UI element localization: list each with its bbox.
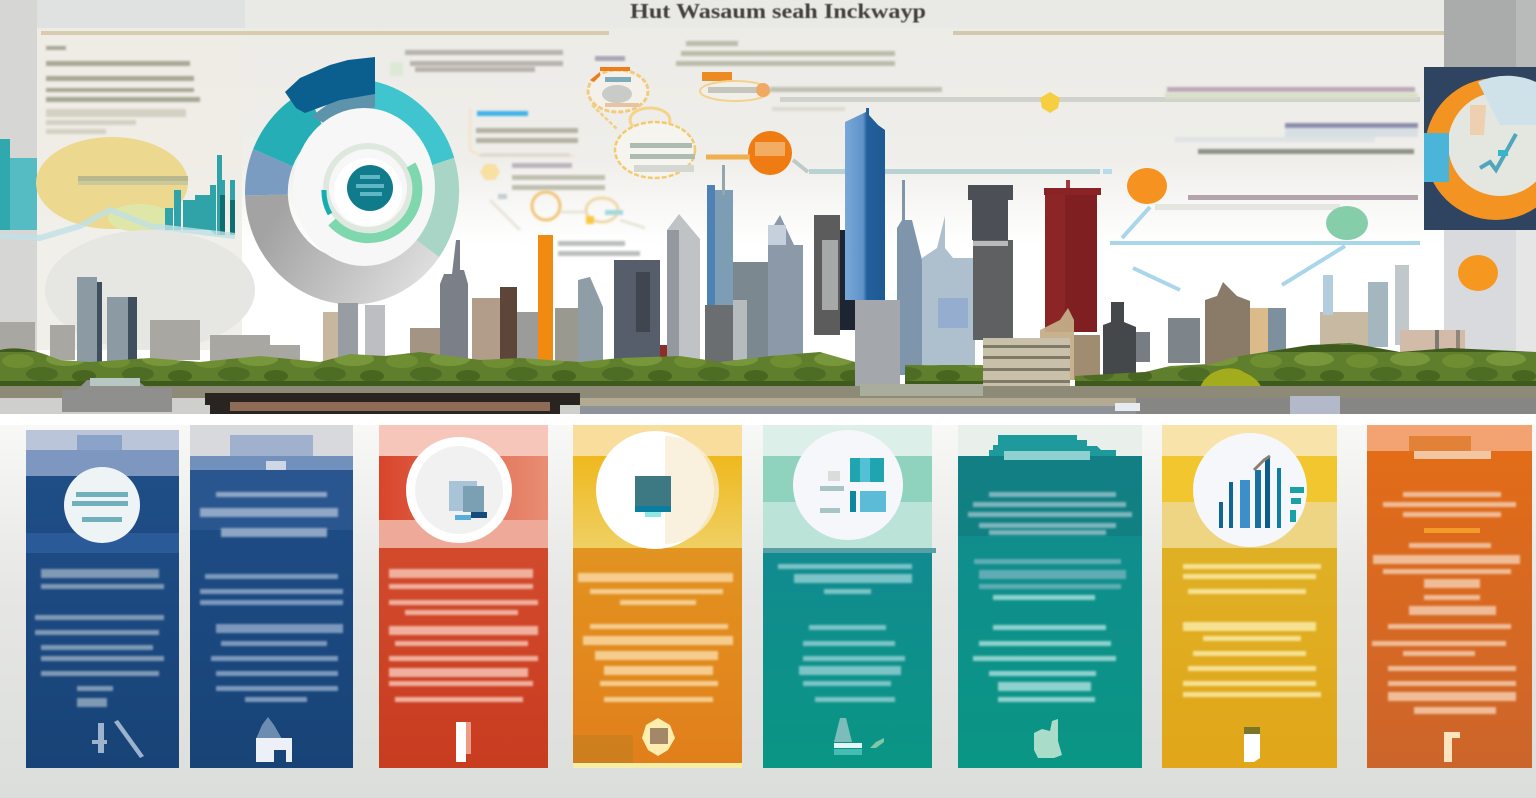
blue network lines xyxy=(1110,207,1420,290)
panel 5: teal xyxy=(763,425,936,768)
body text xyxy=(578,573,733,702)
gray tower base in front of trees xyxy=(855,300,900,388)
panel 2: navy with tab xyxy=(190,425,353,768)
header rule left xyxy=(41,31,609,35)
small connected flow rings xyxy=(490,192,645,230)
second orange callout xyxy=(700,72,770,101)
tab heading xyxy=(1004,451,1090,460)
mid towers xyxy=(555,308,583,364)
dark column tower xyxy=(968,185,1013,340)
donut green right segment xyxy=(422,165,438,244)
donut inner teal arc xyxy=(324,190,330,214)
icon: crane xyxy=(834,718,884,755)
donut dark blue arrow xyxy=(285,57,375,113)
top backdrop panel xyxy=(0,0,1536,420)
tab heading xyxy=(1414,451,1491,459)
orange ring callout xyxy=(588,67,648,112)
blue skyscraper xyxy=(845,108,885,300)
icon: bottle xyxy=(1244,727,1260,762)
orange bar tower xyxy=(538,235,553,360)
building under donut xyxy=(323,312,338,362)
orange highlight line xyxy=(1424,528,1480,533)
donut hub xyxy=(347,165,393,211)
right icon badge xyxy=(1424,67,1536,230)
badge icon xyxy=(449,481,487,520)
icon: hand xyxy=(1034,719,1062,758)
pale disc behind skyline xyxy=(45,230,255,350)
badge circle xyxy=(596,431,714,549)
icon: flag xyxy=(1444,732,1460,762)
horizontal line with gold marker xyxy=(780,92,1420,113)
boat xyxy=(62,380,172,412)
header rule right xyxy=(953,31,1444,35)
body text xyxy=(389,569,538,702)
badge icon xyxy=(635,476,671,517)
text beside orange bar xyxy=(558,241,640,256)
icon: badge xyxy=(642,718,675,756)
callout above donut xyxy=(390,50,563,76)
orange node 2 xyxy=(1127,168,1167,204)
body text xyxy=(1372,492,1520,714)
red column tower xyxy=(1044,180,1101,332)
donut teal left segment xyxy=(273,111,316,158)
small label above ring xyxy=(595,56,625,61)
mid left tower with spire xyxy=(440,240,468,374)
badge text xyxy=(72,492,128,522)
badge icon xyxy=(820,458,886,513)
connector from orange node to skyline xyxy=(793,160,1112,174)
pale label line xyxy=(1155,204,1340,210)
donut slate accent xyxy=(312,93,375,127)
callout: blue label block xyxy=(470,108,578,157)
icon: tools xyxy=(92,720,144,758)
callout: gold hexagon with text xyxy=(480,163,605,190)
orange node 3 xyxy=(1458,255,1498,291)
donut inner white disc xyxy=(293,108,435,266)
upper center text lines xyxy=(676,41,895,66)
left towers xyxy=(77,277,129,367)
panel 1: navy xyxy=(26,430,179,768)
body text xyxy=(35,569,164,707)
heading lines xyxy=(200,492,338,537)
brown buildings xyxy=(472,298,500,364)
body text xyxy=(200,574,343,702)
upper right text rows xyxy=(770,87,942,111)
tan buildings xyxy=(1040,308,1074,380)
dock xyxy=(205,393,580,414)
body text xyxy=(778,564,912,702)
green node xyxy=(1326,206,1368,240)
icon: white bar xyxy=(456,722,471,762)
purple label line xyxy=(1188,195,1418,200)
donut chart xyxy=(266,57,438,282)
panel 3: red xyxy=(379,425,548,768)
waterfront and dock xyxy=(0,378,1536,414)
gold link to orange node xyxy=(706,154,750,160)
donut gray segment xyxy=(266,195,422,282)
upper right text block xyxy=(1165,87,1418,154)
left text block faint lines xyxy=(46,109,186,134)
badge circle xyxy=(64,467,140,543)
panel 6: teal with tab xyxy=(958,425,1142,768)
badge circle xyxy=(406,437,512,543)
donut inner mint arc xyxy=(332,165,417,238)
icon: house xyxy=(256,717,292,762)
body text xyxy=(968,492,1132,535)
skyline xyxy=(0,108,1465,385)
badge circle xyxy=(793,430,903,540)
low striped building xyxy=(983,338,1070,396)
center gray tower group xyxy=(768,215,803,360)
distant buildings left xyxy=(0,320,300,365)
soft lower backdrop xyxy=(0,425,1536,798)
orange node highlight xyxy=(755,142,785,156)
panel 4: orange xyxy=(573,425,742,768)
panel 7: gold xyxy=(1162,425,1337,768)
lower band white separator xyxy=(0,414,1536,425)
body text xyxy=(1183,564,1321,697)
right connector nodes xyxy=(706,131,1498,291)
badge bar chart xyxy=(1219,456,1304,528)
badge circle xyxy=(1193,433,1307,547)
panel 8: rust xyxy=(1367,425,1532,768)
donut inner pale ring xyxy=(326,146,410,230)
orange node 1 xyxy=(748,131,792,175)
ring network node xyxy=(592,105,695,178)
donut teal right segment xyxy=(367,103,434,165)
donut hub text bars xyxy=(356,175,384,196)
donut inner white core xyxy=(334,158,402,226)
left text block xyxy=(46,46,200,102)
left chart: teal block, yellow circle and bars xyxy=(0,137,235,238)
tree line xyxy=(0,343,1536,392)
donut blue-gray segment xyxy=(266,158,273,195)
